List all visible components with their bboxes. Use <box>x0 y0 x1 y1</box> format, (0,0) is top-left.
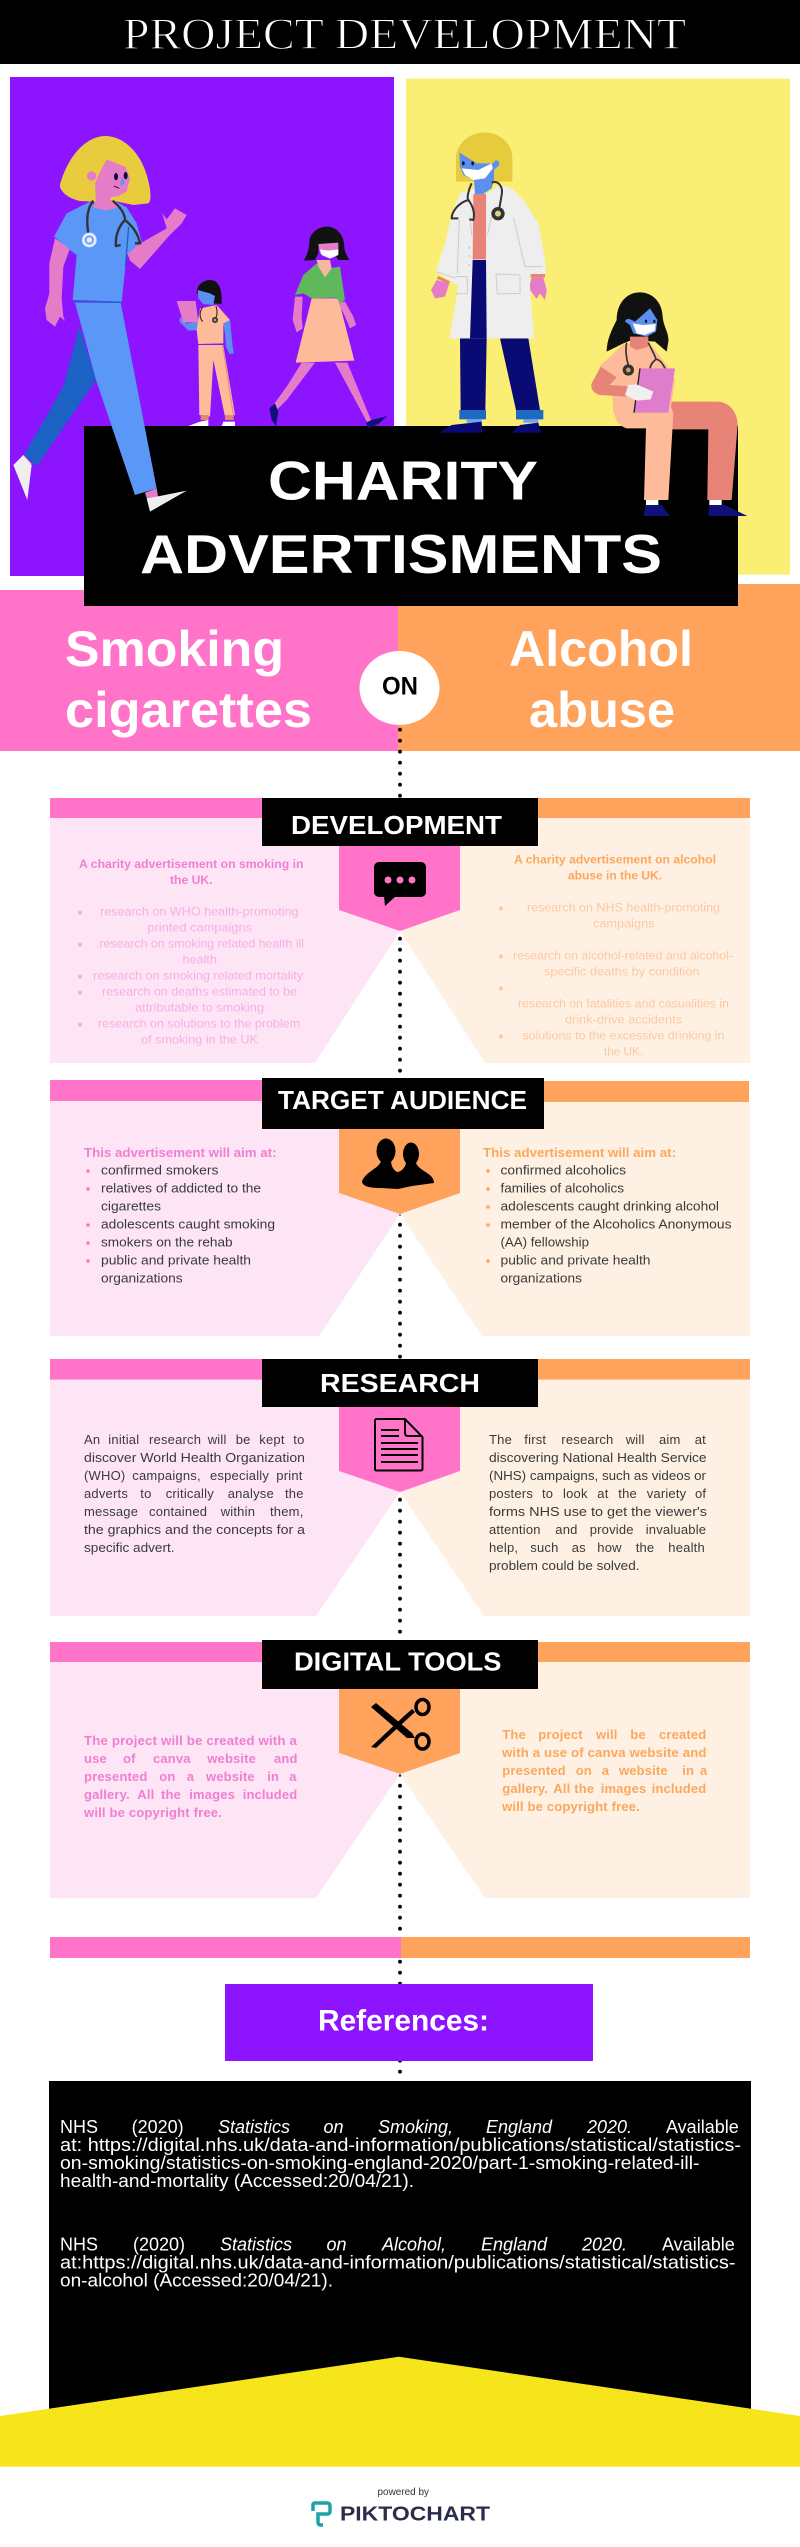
panel: alcohol research: forms NHS use to get the viewer's <box>489 1504 708 1519</box>
panel: smoking research: message <box>84 1504 138 1519</box>
banner: alcohol abuse <box>398 584 800 751</box>
divider strip <box>50 1937 750 1958</box>
icon: piktochart logo <box>313 2503 330 2525</box>
panel: smoking digital tools: of <box>123 1751 136 1766</box>
header band: project development: PROJECT DEVELOPMENT <box>123 10 686 59</box>
panel: alcohol research: health <box>668 1540 705 1555</box>
panel: smoking research: especially <box>210 1468 269 1483</box>
panel: alcohol research: help, <box>489 1540 518 1555</box>
header bar: pink <box>50 1642 262 1662</box>
header bar: pink <box>50 798 262 818</box>
reference: alcohol: 2020. <box>581 2235 627 2255</box>
chevron with people icon <box>339 1129 460 1214</box>
heading: digital tools: DIGITAL TOOLS <box>294 1647 502 1677</box>
panel: alcohol digital tools: will be copyright free. <box>501 1799 640 1814</box>
panel: alcohol development: research on fatalities and casualities in <box>518 997 729 1011</box>
panel: alcohol research: first <box>524 1432 546 1447</box>
on circle: ON <box>382 672 418 700</box>
panel: alcohol research: attention <box>489 1522 541 1537</box>
panel: smoking digital tools: presented <box>84 1769 147 1784</box>
panel: smoking research: contained <box>149 1504 207 1519</box>
panel: smoking research: kept <box>259 1432 285 1447</box>
panel: alcohol audience: families of alcoholics <box>500 1180 625 1196</box>
reference: alcohol: England <box>481 2235 548 2255</box>
panel: alcohol digital tools: project <box>538 1727 583 1742</box>
panel: smoking digital tools: use <box>84 1751 107 1766</box>
purple background panel <box>10 77 394 576</box>
section: development <box>50 798 750 1063</box>
panel: alcohol research: to <box>542 1486 553 1501</box>
panel: smoking audience: adolescents caught smoking <box>101 1217 275 1232</box>
header bar: orange <box>538 1359 750 1380</box>
panel: smoking digital tools: will be copyright free. <box>83 1805 222 1820</box>
panel: alcohol research <box>400 1380 750 1616</box>
title box: charity advertisments <box>84 426 738 606</box>
panel: alcohol development: campaigns <box>593 917 654 931</box>
reference: smoking: health-and-mortality (Accessed:20/04/21). <box>60 2171 414 2191</box>
panel: smoking audience <box>50 1101 400 1336</box>
panel: alcohol digital tools: presented <box>502 1763 566 1778</box>
panel: smoking research: campaigns, <box>132 1468 201 1483</box>
section: target audience <box>50 1078 750 1336</box>
panel: alcohol digital tools: be <box>630 1727 646 1742</box>
references heading: References: <box>318 2005 489 2038</box>
figure: small nurse with tablet <box>177 280 235 426</box>
title box: charity advertisments: CHARITY <box>268 450 538 512</box>
chevron with speech bubble icon <box>339 846 460 931</box>
figure: walking nurse <box>13 136 187 512</box>
illustration: people on yellow panel <box>431 132 747 516</box>
panel: smoking development: the UK. <box>170 873 212 887</box>
panel: alcohol digital tools: will <box>595 1727 618 1742</box>
section: digital tools <box>50 1640 750 1898</box>
reference: alcohol: on <box>326 2235 347 2255</box>
reference: smoking: at: https://digital.nhs.uk/data-and-information/publications/statistical/statistics- <box>60 2135 741 2155</box>
panel: smoking research: within <box>220 1504 255 1519</box>
panel: smoking research: research <box>149 1432 201 1447</box>
panel: alcohol digital tools: created <box>659 1727 706 1742</box>
panel: smoking digital tools: gallery. <box>84 1787 130 1802</box>
panel: alcohol audience: adolescents caught drinking alcohol <box>500 1198 719 1213</box>
panel: smoking digital tools: a <box>187 1769 195 1784</box>
panel: smoking research <box>50 1380 400 1616</box>
panel: smoking development <box>50 818 400 1063</box>
panel: smoking audience: cigarettes <box>101 1198 162 1213</box>
reference: smoking <box>60 2117 741 2191</box>
panel: alcohol research: research <box>561 1432 613 1447</box>
panel: alcohol research: (NHS) campaigns, such as videos or <box>489 1468 707 1483</box>
reference: alcohol: Available <box>662 2235 735 2255</box>
banner: smoking cigarettes: cigarettes <box>65 682 312 738</box>
yellow footer shape <box>0 2357 800 2467</box>
panel: alcohol digital tools: with a use of canva website and <box>501 1745 707 1760</box>
panel: alcohol research: invaluable <box>646 1522 706 1537</box>
panel: smoking research: specific advert. <box>84 1540 174 1555</box>
panel: alcohol digital tools: All <box>553 1781 570 1796</box>
panel: alcohol development: solutions to the excessive drinking in <box>522 1029 724 1043</box>
panel: alcohol audience: This advertisement will aim at: <box>483 1145 676 1160</box>
panel: alcohol digital tools: on <box>576 1763 592 1778</box>
panel: alcohol digital tools: included <box>652 1781 706 1796</box>
panel: smoking digital tools <box>50 1662 400 1898</box>
panel: alcohol development: research on alcohol-related and alcohol- <box>513 949 733 963</box>
panel: smoking audience: organizations <box>101 1270 183 1286</box>
panel: smoking development: of smoking in the UK <box>141 1033 258 1047</box>
panel: alcohol audience <box>400 1102 750 1336</box>
reference: alcohol: Statistics <box>220 2235 292 2255</box>
header bar: orange <box>538 1642 750 1662</box>
panel: alcohol research: the <box>618 1486 637 1501</box>
panel: alcohol research: look <box>563 1486 588 1501</box>
panel: alcohol audience: public and private health <box>500 1253 650 1268</box>
heading: target audience <box>262 1078 544 1129</box>
panel: alcohol research: as <box>572 1540 586 1555</box>
panel: smoking development: research on solutions to the problem <box>98 1017 300 1031</box>
reference: smoking: NHS <box>60 2117 98 2137</box>
heading: development <box>262 798 538 846</box>
chevron with scissors icon <box>339 1689 460 1774</box>
panel: alcohol digital tools: gallery. <box>502 1781 548 1796</box>
panel: alcohol research: problem could be solved. <box>489 1558 640 1573</box>
reference: smoking: (2020) <box>132 2117 184 2137</box>
panel: smoking digital tools: canva <box>153 1751 191 1766</box>
panel: alcohol digital tools: a <box>602 1763 610 1778</box>
panel: alcohol digital tools: in <box>682 1763 694 1778</box>
panel: alcohol development <box>400 818 750 1063</box>
panel: alcohol research: how <box>597 1540 622 1555</box>
heading: development: DEVELOPMENT <box>291 810 502 840</box>
panel: smoking development: A charity advertisement on smoking in <box>79 857 304 871</box>
panel: smoking audience: relatives of addicted to the <box>101 1180 261 1196</box>
reference: alcohol: on-alcohol (Accessed:20/04/21). <box>60 2271 333 2291</box>
chevron with document icon <box>339 1407 460 1492</box>
header bar: orange <box>538 798 750 818</box>
panel: alcohol development: the UK. <box>604 1045 643 1059</box>
panel: smoking research: the graphics and the concepts for a <box>84 1522 306 1537</box>
reference: alcohol: (2020) <box>133 2235 185 2255</box>
panel: smoking digital tools: images <box>189 1787 235 1802</box>
panel: smoking development: attributable to smoking <box>135 1001 264 1015</box>
panel: alcohol development: drink-drive accidents <box>565 1013 682 1027</box>
piktochart credit: PIKTOCHART <box>340 2504 490 2526</box>
panel: smoking audience: This advertisement will aim at: <box>84 1145 276 1160</box>
panel: smoking research: print <box>276 1468 303 1483</box>
panel: alcohol audience: organizations <box>500 1270 583 1286</box>
panel: smoking research: to <box>140 1486 152 1501</box>
reference: alcohol <box>60 2235 736 2291</box>
heading: research <box>262 1359 538 1407</box>
panel: smoking development: health <box>182 953 217 967</box>
panel: smoking digital tools: a <box>289 1769 297 1784</box>
panel: smoking audience: confirmed smokers <box>101 1163 219 1178</box>
panel: alcohol development: specific deaths by condition <box>544 965 700 979</box>
panel: alcohol audience: confirmed alcoholics <box>500 1163 627 1178</box>
reference: alcohol: NHS <box>60 2235 98 2255</box>
panel: smoking digital tools: All <box>137 1787 154 1802</box>
reference: smoking: 2020. <box>586 2117 632 2137</box>
panel: alcohol research: and <box>555 1522 578 1537</box>
panel: alcohol research: at <box>597 1486 609 1501</box>
panel: alcohol audience: member of the Alcoholics Anonymous <box>500 1217 732 1232</box>
panel: smoking digital tools: website <box>205 1769 255 1784</box>
reference: alcohol: at:https://digital.nhs.uk/data-and-information/publications/statistical/statistics- <box>60 2253 736 2273</box>
figure: woman in green top <box>269 227 387 428</box>
heading: digital tools <box>262 1640 538 1689</box>
header bar: pink <box>50 1359 262 1380</box>
panel: alcohol research: at <box>695 1432 706 1447</box>
reference: alcohol: Alcohol, <box>381 2235 446 2255</box>
panel: smoking research: (WHO) <box>84 1468 125 1483</box>
panel: alcohol research: aim <box>659 1432 681 1447</box>
on circle <box>360 651 440 725</box>
panel: smoking research: to <box>293 1432 305 1447</box>
panel: smoking development: research on smoking related mortality <box>93 969 303 983</box>
panel: smoking research: adverts <box>84 1486 128 1501</box>
panel: alcohol research: variety <box>647 1486 687 1501</box>
panel: alcohol research: such <box>530 1540 559 1555</box>
panel: smoking digital tools: and <box>274 1751 298 1766</box>
panel: alcohol development: abuse in the UK. <box>568 868 662 882</box>
panel: alcohol digital tools <box>400 1662 750 1898</box>
banner: smoking cigarettes <box>0 590 398 751</box>
heading: research: RESEARCH <box>320 1368 480 1398</box>
panel: alcohol digital tools: images <box>601 1781 646 1796</box>
panel: smoking research: critically <box>166 1486 214 1501</box>
panel: smoking research: them, <box>270 1504 304 1519</box>
panel: alcohol research: discovering National Health Service <box>489 1450 707 1465</box>
reference: smoking: Statistics <box>218 2117 290 2137</box>
panel: alcohol research: of <box>695 1486 706 1501</box>
panel: alcohol digital tools: a <box>700 1763 708 1778</box>
panel: alcohol development: A charity advertisement on alcohol <box>514 853 716 867</box>
panel: smoking digital tools: The project will be created with a <box>84 1733 298 1748</box>
panel: smoking audience: smokers on the rehab <box>101 1234 233 1249</box>
panel: alcohol digital tools: website <box>618 1763 668 1778</box>
panel: smoking digital tools: the <box>161 1787 181 1802</box>
figure: doctor in white coat <box>431 132 547 433</box>
title box: charity advertisments: ADVERTISMENTS <box>140 523 662 585</box>
references heading <box>225 1984 593 2061</box>
illustration: people on purple panel <box>13 136 387 512</box>
yellow background panel <box>406 78 790 574</box>
panel: smoking development: .research on smoking related health ill <box>96 937 304 951</box>
panel: alcohol digital tools: the <box>574 1781 594 1796</box>
panel: smoking research: be <box>236 1432 251 1447</box>
banner: alcohol abuse: Alcohol <box>509 621 693 677</box>
reference: smoking: on-smoking/statistics-on-smoking-england-2020/part-1-smoking-related-ill- <box>60 2153 700 2173</box>
panel: alcohol research: posters <box>489 1486 533 1501</box>
panel: alcohol research: the <box>636 1540 654 1555</box>
panel: smoking audience: public and private health <box>101 1253 251 1268</box>
reference: smoking: England <box>486 2117 553 2137</box>
reference: smoking: Available <box>666 2117 739 2137</box>
panel: smoking development: printed campaigns <box>148 921 252 935</box>
piktochart credit: powered by <box>378 2486 430 2498</box>
panel: alcohol research: provide <box>590 1522 634 1537</box>
banner: smoking cigarettes: Smoking <box>65 621 284 677</box>
panel: smoking research: initial <box>108 1432 139 1447</box>
panel: smoking research: the <box>285 1486 304 1501</box>
panel: smoking digital tools: website <box>206 1751 256 1766</box>
dotted centre line <box>398 730 402 2081</box>
heading: target audience: TARGET AUDIENCE <box>278 1085 527 1115</box>
panel: alcohol research: will <box>625 1432 645 1447</box>
banner: alcohol abuse: abuse <box>529 682 675 738</box>
panel: smoking research: An <box>84 1432 100 1447</box>
header bar: orange <box>544 1081 749 1102</box>
panel: smoking research: discover World Health Organization <box>84 1450 305 1465</box>
reference: smoking: Smoking, <box>378 2117 453 2137</box>
panel: smoking research: will <box>207 1432 227 1447</box>
header bar: pink <box>50 1080 262 1101</box>
panel: smoking digital tools: in <box>267 1769 279 1784</box>
piktochart credit <box>313 2486 490 2526</box>
reference: smoking: on <box>324 2117 344 2137</box>
header band: project development <box>0 0 800 64</box>
figure: seated woman with clipboard <box>591 292 747 516</box>
panel: alcohol research: The <box>489 1432 512 1447</box>
panel: smoking digital tools: included <box>243 1787 297 1802</box>
panel: smoking development: research on deaths estimated to be <box>102 985 297 999</box>
panel: alcohol audience: (AA) fellowship <box>500 1234 589 1249</box>
panel: alcohol digital tools: The <box>502 1727 526 1742</box>
section: research <box>50 1359 750 1616</box>
panel: smoking development: research on WHO health-promoting <box>100 905 298 919</box>
panel: smoking research: analyse <box>228 1486 274 1501</box>
references panel <box>49 2081 751 2421</box>
panel: alcohol development: research on NHS health-promoting <box>527 901 720 915</box>
panel: smoking digital tools: on <box>159 1769 175 1784</box>
